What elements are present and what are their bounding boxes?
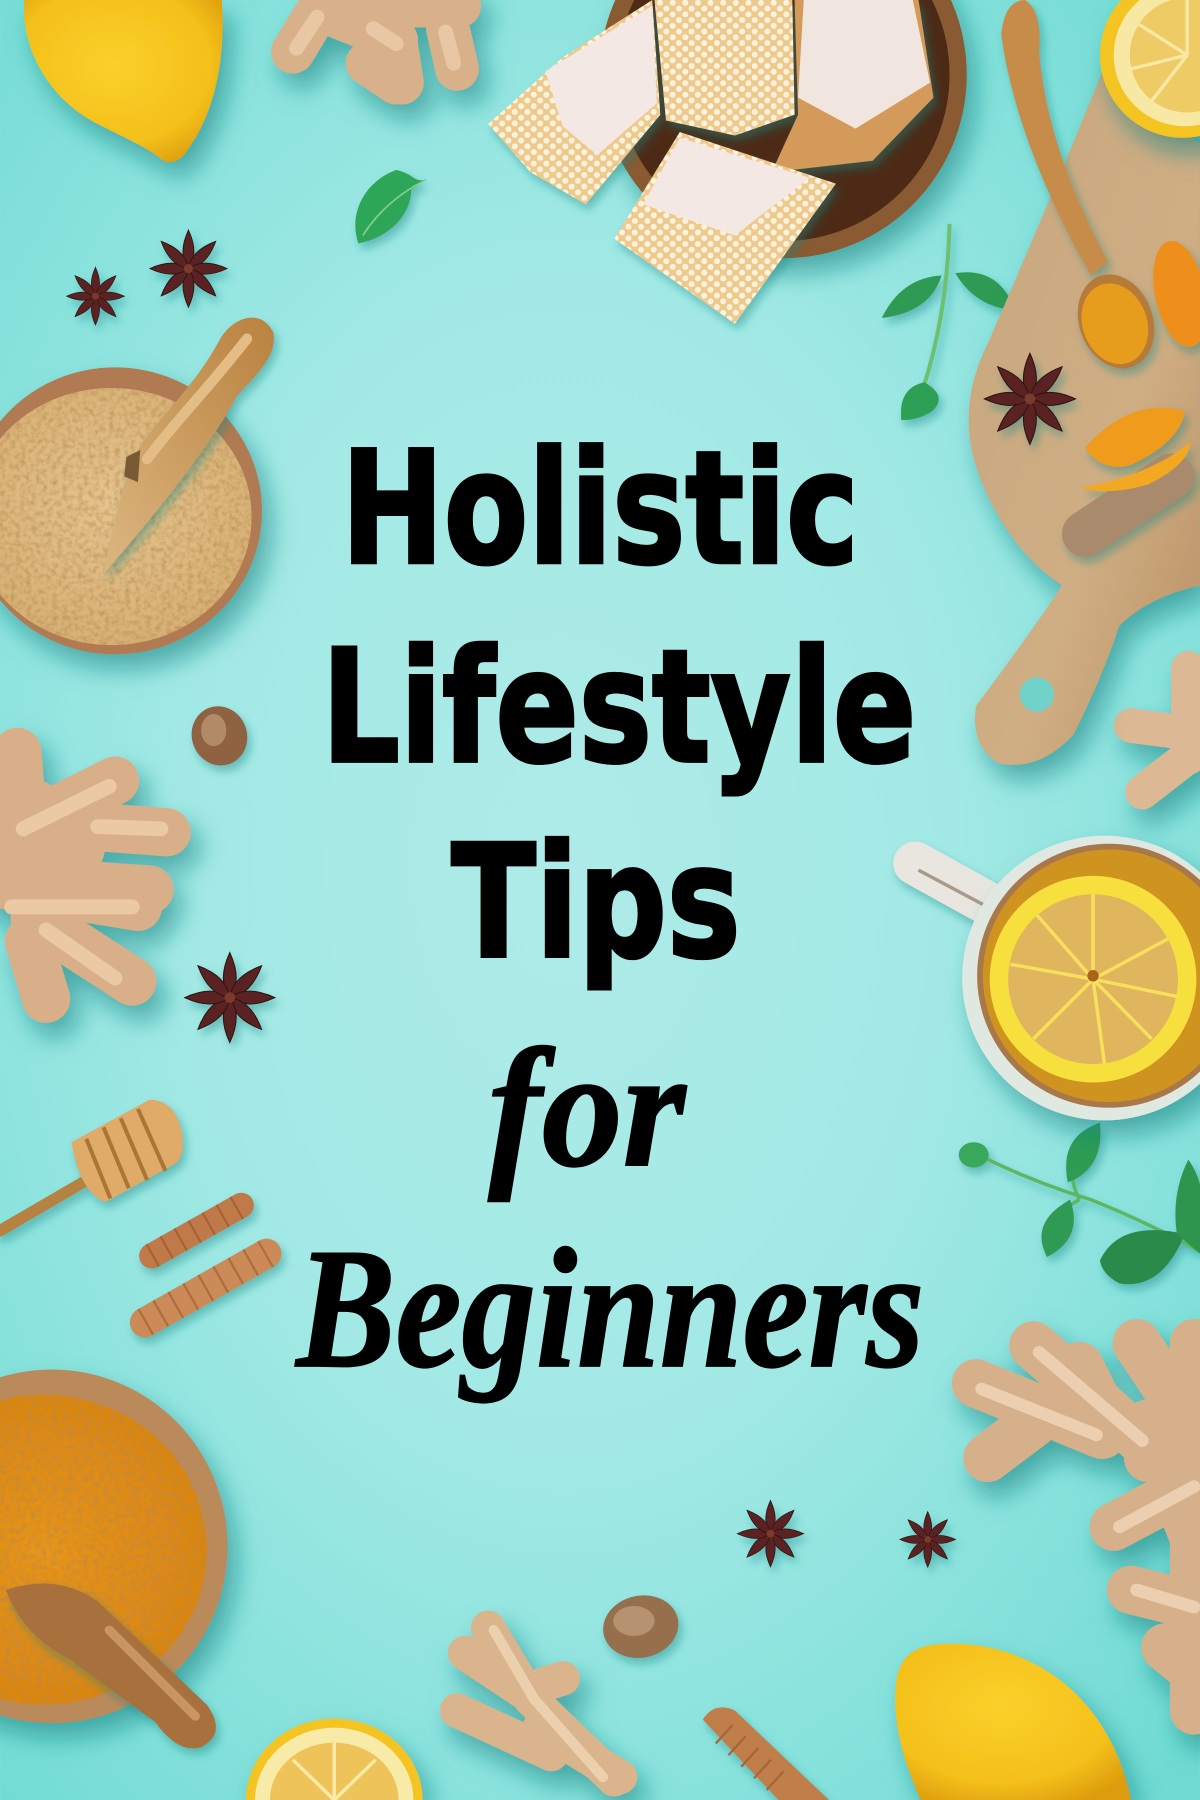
wooden scoop (104, 318, 274, 574)
title line: for: for (488, 1014, 687, 1202)
title line: Beginners: Beginners (295, 1214, 924, 1404)
board shape (969, 57, 1200, 765)
ginger: right large (976, 1343, 1200, 1710)
wooden bowl (0, 367, 262, 654)
ginger powder (0, 388, 252, 645)
cutting board (969, 0, 1200, 765)
star anise pair: top left (67, 230, 227, 325)
title line: Tips: Tips (451, 811, 741, 993)
mint sprig: upper right (882, 224, 1015, 420)
mint sprig: right (959, 1123, 1200, 1284)
lemon half: bottom (246, 1719, 423, 1800)
lemon slice (990, 876, 1196, 1083)
ginger powder bowl (0, 318, 274, 654)
ginger: left (0, 752, 167, 999)
cup handle (915, 863, 990, 907)
lemon: bottom right (895, 1644, 1131, 1800)
turmeric bowl (0, 1370, 227, 1748)
turmeric root: bottom (703, 1707, 829, 1800)
star anise (984, 353, 1075, 444)
mint leaf (355, 170, 427, 243)
tea cup (915, 836, 1200, 1120)
cup body (962, 836, 1200, 1120)
ginger: right small (1131, 668, 1200, 792)
honeycomb bowl (488, 0, 967, 324)
nutmeg: bottom (597, 1588, 684, 1665)
ginger: bottom (457, 1628, 620, 1779)
honey dipper (0, 1100, 183, 1231)
title line: Holistic: Holistic (341, 417, 859, 599)
turmeric root (1079, 408, 1191, 534)
turmeric slice (1144, 236, 1200, 352)
lemon: top left (24, 0, 223, 162)
title (295, 417, 924, 1404)
title line: Lifestyle: Lifestyle (322, 616, 916, 798)
lemon half: top right (1105, 0, 1200, 133)
cup rim (977, 844, 1200, 1108)
wooden bowl (0, 1370, 227, 1723)
turmeric powder (0, 1395, 207, 1705)
wooden bowl (599, 0, 967, 258)
nutmeg: left (183, 698, 256, 773)
wooden spoon with turmeric (1001, 0, 1167, 379)
wooden scoop (6, 1583, 216, 1748)
star anise pair: bottom (737, 1500, 956, 1567)
tea (983, 849, 1200, 1102)
turmeric roots: left (145, 1205, 267, 1322)
star anise: left (185, 953, 275, 1043)
honeycomb pieces (488, 0, 933, 324)
ginger: top (293, 6, 459, 83)
